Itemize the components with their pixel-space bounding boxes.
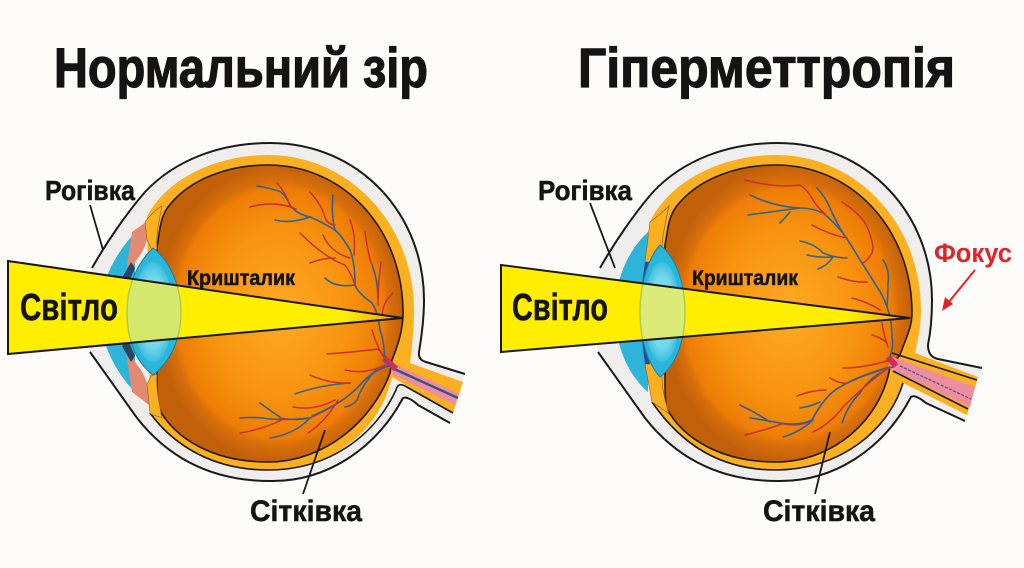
optic nerve <box>384 358 458 405</box>
retinal blood vessels <box>240 183 393 438</box>
panel: hyperopia eye diagram <box>501 143 1012 528</box>
optic nerve <box>888 353 977 409</box>
title: hyperopia: Гіперметтропія <box>578 36 955 99</box>
label: focus: Фокус <box>934 238 1012 268</box>
label: light: Світло <box>20 287 118 329</box>
label: retina with pointer <box>250 430 362 528</box>
eye outer sclera <box>594 143 982 481</box>
label: retina with pointer: Сітківка <box>763 495 875 528</box>
cornea <box>615 232 648 392</box>
label: lens: Кришталик <box>692 267 798 290</box>
yellow choroid layer <box>147 155 463 470</box>
label: light: Світло <box>512 287 608 329</box>
arrow: focus pointer <box>942 270 975 311</box>
label: cornea with pointer: Рогівка <box>45 175 135 206</box>
orange eyeball interior <box>665 165 912 462</box>
label: cornea with pointer <box>538 175 632 268</box>
eye outer sclera <box>86 143 465 481</box>
light beam <box>7 260 402 356</box>
panel: normal eye diagram <box>8 143 465 528</box>
yellow choroid layer <box>650 155 978 470</box>
label: cornea with pointer <box>45 175 135 250</box>
label: cornea with pointer: Рогівка <box>538 175 632 206</box>
label: lens: Кришталик <box>187 267 295 290</box>
iris and ciliary body <box>122 206 162 418</box>
lens <box>127 248 181 375</box>
cornea <box>100 233 135 392</box>
iris and ciliary body <box>642 206 669 414</box>
label: retina with pointer: Сітківка <box>250 495 362 528</box>
light beam <box>500 264 910 354</box>
label: retina with pointer <box>763 432 875 528</box>
retinal blood vessels <box>740 180 893 437</box>
orange eyeball interior <box>157 165 403 462</box>
lens <box>640 245 685 377</box>
title: normal vision: Нормальний зір <box>54 36 428 99</box>
